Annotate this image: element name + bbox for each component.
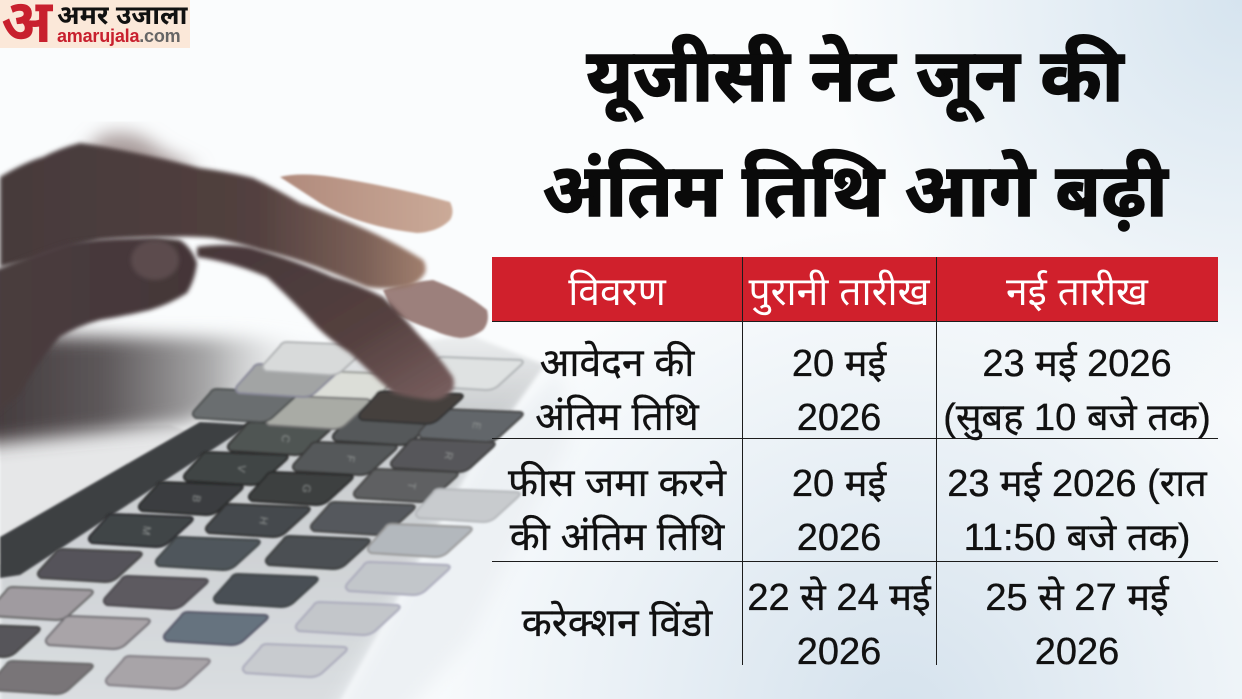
row 3 label: करेक्शन विंडो <box>522 602 712 645</box>
key letters: H <box>256 516 270 526</box>
key letters: B <box>189 494 203 503</box>
row 2 old date: 2026 <box>797 517 881 559</box>
row 1 label <box>535 340 700 439</box>
logo: Amar Ujala <box>0 0 190 48</box>
key letters: F <box>343 454 356 463</box>
logo url: amarujala.com <box>57 26 180 46</box>
header: new date: नई तारीख <box>1006 271 1148 314</box>
key letters: R <box>441 451 455 461</box>
row 1 label: आवेदन की <box>540 342 694 385</box>
row 2 old date <box>792 462 887 559</box>
row 2 label: फीस जमा करने <box>508 462 726 505</box>
header: details: विवरण <box>568 271 666 314</box>
row 2 label: की अंतिम तिथि <box>510 516 724 559</box>
title: अंतिम तिथि आगे बढ़ी <box>542 149 1168 232</box>
row 2 new date: 11:50 बजे तक) <box>964 517 1190 559</box>
key letters: V <box>234 464 248 474</box>
laptop deck <box>0 335 570 699</box>
row 1 label: अंतिम तिथि <box>535 396 699 439</box>
row 1 old date: 20 मई <box>792 343 886 385</box>
row 3 old date <box>747 576 932 673</box>
hand <box>0 133 488 420</box>
row 1 new date <box>943 342 1211 440</box>
row 2 new date: 23 मई 2026 (रात <box>947 463 1207 505</box>
row 3 new date <box>985 576 1170 673</box>
key letters <box>139 421 483 536</box>
key letters: G <box>299 483 313 494</box>
key letters: E <box>469 421 483 430</box>
header: old date: पुरानी तारीख <box>748 271 930 314</box>
table header <box>492 257 1218 321</box>
row 3 old date: 2026 <box>797 631 881 673</box>
logo wordmark: अमर उजाला <box>57 0 187 30</box>
space bar <box>0 422 250 578</box>
row 3 old date: 22 से 24 मई <box>747 577 931 619</box>
key letters: C <box>278 434 292 444</box>
row 3 new date: 25 से 27 मई <box>985 577 1169 619</box>
row 1 new date: (सुबह 10 बजे तक) <box>943 397 1211 439</box>
key letters: M <box>139 525 153 536</box>
key letters: T <box>404 481 417 490</box>
row 2 new date <box>947 462 1208 559</box>
row 1 old date <box>792 342 887 439</box>
keys <box>0 342 523 694</box>
row 2 label <box>508 460 727 559</box>
row 2 old date: 20 मई <box>792 463 886 505</box>
row 1 new date: 23 मई 2026 <box>982 343 1172 385</box>
title <box>542 34 1170 232</box>
title: यूजीसी नेट जून की <box>586 34 1124 117</box>
row 1 old date: 2026 <box>797 397 881 439</box>
row 3 new date: 2026 <box>1035 631 1119 673</box>
